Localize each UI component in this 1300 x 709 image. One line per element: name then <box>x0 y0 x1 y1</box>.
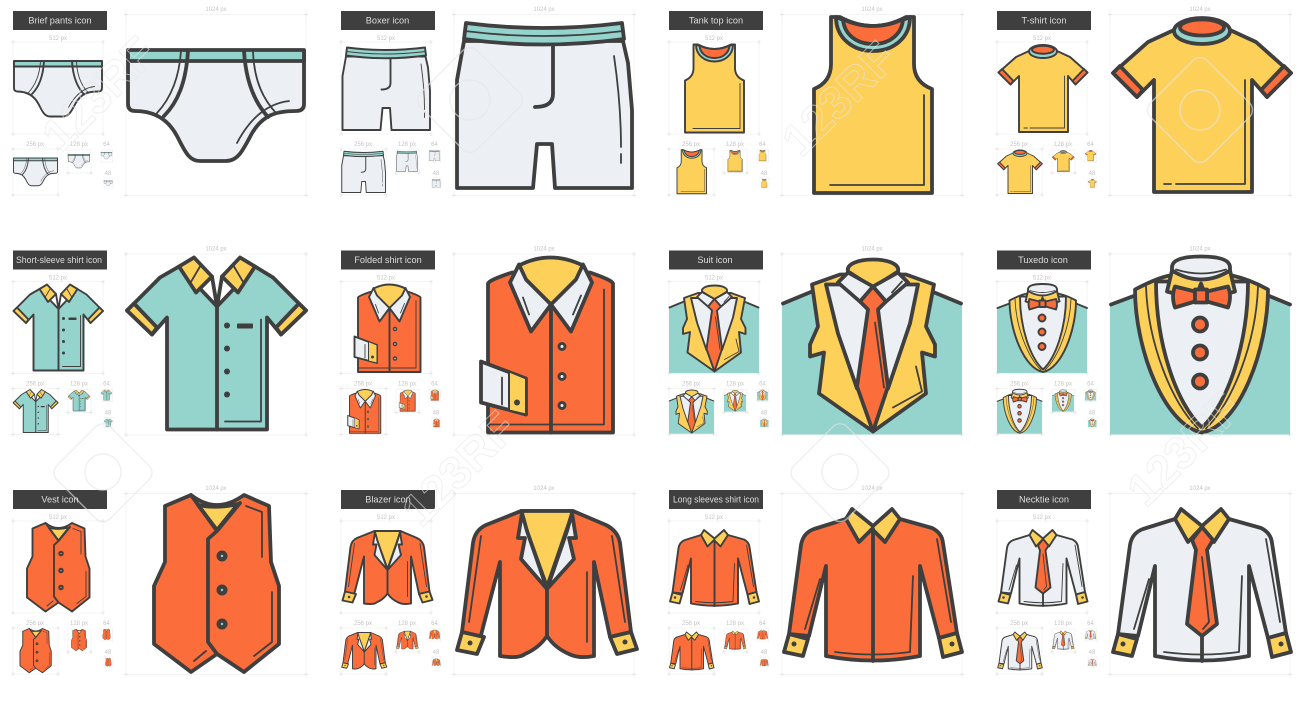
size labels: 64 <box>1087 142 1094 148</box>
size labels: 64 <box>103 142 110 148</box>
heading: Vest icon <box>13 490 107 509</box>
size labels: 1024 px <box>533 486 555 492</box>
size labels: 256 px <box>1010 621 1028 627</box>
size labels: 256 px <box>1010 142 1028 148</box>
size labels <box>682 246 883 416</box>
heading: Folded shirt icon: Folded shirt icon <box>354 255 422 265</box>
heading: Long sleeves shirt icon: Long sleeves shirt icon <box>673 494 759 504</box>
size labels: 48 <box>433 650 440 656</box>
panel: long sleeves shirt icon <box>667 486 964 676</box>
size labels: 128 px <box>726 142 744 148</box>
panel: tuxedo icon <box>995 246 1292 437</box>
size labels: 512 px <box>1033 515 1051 521</box>
icon: brief pants, all sizes <box>14 50 304 186</box>
size labels: 48 <box>433 171 440 177</box>
size labels: 1024 px <box>205 7 227 13</box>
heading: Boxer icon <box>341 11 435 30</box>
size labels: 64 <box>431 142 438 148</box>
size labels <box>682 486 883 656</box>
size labels: 48 <box>1089 410 1096 416</box>
heading: Tuxedo icon: Tuxedo icon <box>1018 255 1068 265</box>
icon: suit, all sizes <box>669 260 962 434</box>
heading: Short-sleeve shirt icon <box>13 250 107 270</box>
size labels: 1024 px <box>533 246 555 252</box>
size labels: 64 <box>759 382 766 388</box>
size labels: 128 px <box>398 621 416 627</box>
panel: tank top icon <box>667 7 964 198</box>
size labels: 256 px <box>26 621 44 627</box>
size labels: 256 px <box>354 382 372 388</box>
watermarks <box>31 26 1257 536</box>
heading: Folded shirt icon <box>341 250 435 270</box>
heading: Tank top icon: Tank top icon <box>689 16 743 26</box>
size labels: 48 <box>433 410 440 416</box>
watermarks: 123RF <box>1116 381 1251 516</box>
size labels <box>1010 246 1211 416</box>
size labels: 48 <box>105 650 112 656</box>
size labels: 256 px <box>682 142 700 148</box>
size labels: 48 <box>1089 650 1096 656</box>
panel: t-shirt icon <box>995 7 1292 198</box>
size labels: 1024 px <box>861 246 883 252</box>
size labels: 1024 px <box>1189 7 1211 13</box>
size labels: 128 px <box>70 621 88 627</box>
heading: Short-sleeve shirt icon: Short-sleeve shirt icon <box>16 255 102 265</box>
size labels: 512 px <box>705 515 723 521</box>
size labels: 48 <box>105 171 112 177</box>
icon: boxer, all sizes <box>342 23 632 192</box>
size labels: 512 px <box>1033 276 1051 282</box>
size labels: 512 px <box>705 36 723 42</box>
size labels: 1024 px <box>1189 246 1211 252</box>
size labels <box>26 486 227 656</box>
watermarks: 123RF <box>771 31 906 166</box>
size labels: 128 px <box>70 382 88 388</box>
size labels <box>1010 486 1211 656</box>
size labels: 64 <box>431 382 438 388</box>
size labels: 128 px <box>70 142 88 148</box>
icon: folded shirt, all sizes <box>348 258 613 433</box>
panel: short-sleeve shirt icon <box>11 246 308 437</box>
size labels: 48 <box>761 171 768 177</box>
size labels: 48 <box>761 650 768 656</box>
size labels: 128 px <box>726 382 744 388</box>
size labels: 1024 px <box>533 7 555 13</box>
size labels <box>354 7 555 177</box>
size labels <box>26 7 227 177</box>
size labels: 48 <box>1089 171 1096 177</box>
size labels: 256 px <box>682 382 700 388</box>
size labels <box>1010 7 1211 177</box>
size labels: 256 px <box>682 621 700 627</box>
size labels: 256 px <box>354 142 372 148</box>
heading: Long sleeves shirt icon <box>669 490 763 509</box>
icon: tank top, all sizes <box>677 17 932 194</box>
size labels: 512 px <box>49 515 67 521</box>
heading: Boxer icon: Boxer icon <box>366 16 409 26</box>
size labels: 256 px <box>1010 382 1028 388</box>
heading: Vest icon: Vest icon <box>41 494 79 504</box>
watermarks: 123RF <box>31 26 166 161</box>
panel: necktie icon <box>995 486 1292 676</box>
size labels: 128 px <box>1054 621 1072 627</box>
heading: Suit icon <box>669 250 763 270</box>
icon: blazer, all sizes <box>342 511 637 669</box>
icon: short-sleeve shirt, all sizes <box>13 258 306 432</box>
size labels: 1024 px <box>861 486 883 492</box>
size labels: 128 px <box>398 142 416 148</box>
heading: T-shirt icon <box>997 11 1091 30</box>
size labels: 1024 px <box>861 7 883 13</box>
size labels <box>682 7 883 177</box>
panel: boxer icon <box>339 7 636 198</box>
heading: Tank top icon <box>669 11 763 30</box>
size labels: 64 <box>759 621 766 627</box>
size labels: 64 <box>431 621 438 627</box>
panel: folded shirt icon <box>339 246 636 437</box>
size labels <box>354 246 555 416</box>
panel: vest icon <box>11 486 308 676</box>
size labels: 128 px <box>398 382 416 388</box>
size labels: 48 <box>761 410 768 416</box>
icon: necktie, all sizes <box>998 509 1291 670</box>
icon: long sleeves shirt, all sizes <box>670 509 962 670</box>
size labels: 128 px <box>1054 382 1072 388</box>
size labels: 256 px <box>26 382 44 388</box>
size labels: 64 <box>103 621 110 627</box>
icon: vest, all sizes <box>20 495 279 673</box>
panel: suit icon <box>667 246 964 437</box>
size labels: 512 px <box>377 36 395 42</box>
heading: Brief pants icon: Brief pants icon <box>28 16 92 26</box>
size labels: 128 px <box>1054 142 1072 148</box>
size labels: 512 px <box>377 276 395 282</box>
size labels: 64 <box>1087 382 1094 388</box>
size labels: 64 <box>103 382 110 388</box>
heading: Necktie icon: Necktie icon <box>1019 494 1069 504</box>
icon: tuxedo, all sizes <box>997 256 1290 434</box>
size labels <box>354 486 555 656</box>
heading: Blazer icon <box>341 490 435 509</box>
size labels: 64 <box>759 142 766 148</box>
panel: blazer icon <box>339 486 637 676</box>
heading: Suit icon: Suit icon <box>697 255 733 265</box>
watermarks: 123RF <box>391 401 526 536</box>
size labels <box>26 246 227 416</box>
size labels: 128 px <box>726 621 744 627</box>
size labels: 1024 px <box>205 486 227 492</box>
size labels: 1024 px <box>1189 486 1211 492</box>
heading: Necktie icon <box>997 490 1091 509</box>
heading: Brief pants icon <box>13 11 107 30</box>
size labels: 512 px <box>377 515 395 521</box>
size labels: 64 <box>1087 621 1094 627</box>
size labels: 256 px <box>354 621 372 627</box>
size labels: 512 px <box>1033 36 1051 42</box>
size labels: 48 <box>105 410 112 416</box>
size labels: 512 px <box>49 276 67 282</box>
size labels: 512 px <box>705 276 723 282</box>
size labels: 512 px <box>49 36 67 42</box>
heading: Tuxedo icon <box>997 250 1091 270</box>
heading: Blazer icon: Blazer icon <box>365 494 411 504</box>
size labels: 1024 px <box>205 246 227 252</box>
heading: T-shirt icon: T-shirt icon <box>1022 16 1066 26</box>
icon: t-shirt, all sizes <box>998 18 1291 194</box>
size labels: 256 px <box>26 142 44 148</box>
panel: brief pants icon <box>11 7 308 198</box>
